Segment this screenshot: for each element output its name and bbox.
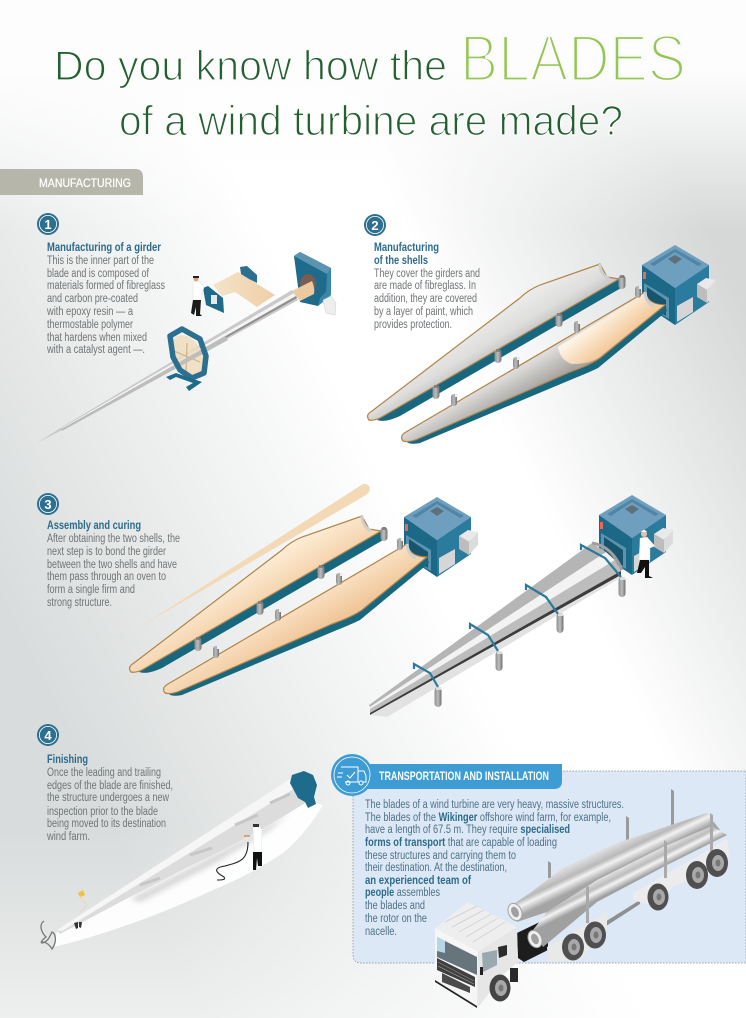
body text: nacelle.	[365, 926, 397, 938]
step 1 text: manufacturing of a girder	[46, 242, 165, 356]
step 2 number badge	[364, 214, 386, 236]
step 3 text: assembly and curing: strong structure.	[47, 597, 112, 609]
step 1 text: manufacturing of a girder: that hardens when mixed	[47, 332, 147, 344]
step 1 text: manufacturing of a girder: thermostable polymer	[47, 319, 133, 331]
body text: their destination. At the destination,	[365, 862, 507, 874]
white blade underside	[53, 800, 323, 947]
step 4 text: finishing	[46, 754, 173, 843]
step 4 number badge: 4	[44, 728, 52, 743]
body text: the rotor on the	[365, 913, 427, 925]
tab heading: TRANSPORTATION AND INSTALLATION	[379, 769, 549, 783]
ring gantry	[61, 329, 228, 431]
front trailer body	[547, 912, 607, 962]
lower shell, tan	[164, 544, 429, 696]
blade shadow	[130, 812, 290, 902]
step 1 number badge	[37, 213, 59, 235]
step 2 text: manufacturing of the shells	[374, 242, 480, 331]
tab heading	[352, 764, 562, 789]
title: BLADES	[460, 21, 686, 95]
worker on blade	[74, 890, 87, 929]
step 3 text: assembly and curing: between the two shells and have	[47, 559, 177, 571]
section tab: manufacturing: MANUFACTURING	[39, 176, 131, 190]
body text: people assembles	[365, 887, 440, 899]
step 4 text: finishing: the structure undergoes a new	[47, 792, 170, 804]
shell supports	[432, 275, 642, 406]
girder above shells	[143, 484, 370, 625]
blue clamps	[414, 545, 621, 687]
rear trailer body	[633, 838, 730, 905]
upper blade	[505, 813, 720, 923]
tapered girder	[37, 281, 314, 443]
upper shell	[368, 264, 621, 421]
body text: the blades and	[365, 900, 425, 912]
step 3 text: assembly and curing: them pass through an oven to	[47, 571, 166, 583]
body text: these structures and carrying them to	[365, 850, 516, 862]
step 3 text: assembly and curing	[47, 520, 180, 609]
illustration: curing in oven	[369, 495, 673, 717]
step 2 text: manufacturing of the shells: They cover the girders and	[374, 268, 480, 280]
title: of a wind turbine are made?	[119, 97, 623, 144]
illustration: shells and oven	[368, 245, 716, 444]
trailer beam	[600, 900, 640, 930]
step 2 text: manufacturing of the shells: addition, they are covered	[374, 293, 477, 305]
step 3 text: assembly and curing: form a single firm and	[47, 584, 135, 596]
panel background	[353, 771, 746, 963]
step 1 text: manufacturing of a girder: materials formed of fibreglass	[47, 280, 165, 292]
step 1 text: manufacturing of a girder: with a catalyst agent —.	[46, 344, 145, 356]
step 1 number badge: 1	[44, 217, 52, 232]
title: Do you know how the	[54, 42, 447, 89]
upper shell, tan	[130, 516, 383, 673]
step 1 text: manufacturing of a girder: This is the inner part of the	[47, 255, 154, 267]
oven	[404, 497, 478, 577]
step 2 text: manufacturing of the shells: provides protection.	[374, 319, 452, 331]
transportation panel	[331, 754, 746, 1008]
body text: an experienced team of	[365, 875, 471, 887]
step 2 text: manufacturing of the shells: by a layer of paint, which	[374, 306, 473, 318]
blade root cap	[290, 771, 317, 808]
body text: The blades of the Wikinger offshore wind farm, for example,	[365, 812, 611, 824]
back stakes	[548, 789, 674, 878]
inspector with hose	[217, 824, 262, 880]
title	[54, 21, 686, 144]
body text: The blades of a wind turbine are very heavy, massive structures.	[365, 799, 624, 811]
blue mould frame	[294, 252, 336, 315]
supports	[434, 577, 626, 707]
step 4 text: finishing: wind farm.	[46, 831, 90, 843]
truck with blades	[435, 789, 730, 1008]
illustration: girder manufacturing	[37, 252, 336, 443]
step 1 text: manufacturing of a girder: blade and is composed of	[47, 268, 150, 280]
oven	[599, 495, 673, 575]
trailer wheels	[562, 849, 728, 960]
step 4 text: finishing: edges of the blade are finished,	[47, 780, 173, 792]
step 1 text: manufacturing of a girder: and carbon pre-coated	[47, 293, 138, 305]
step 3 number badge	[37, 493, 59, 515]
illustration: assembly with girder between shells	[130, 484, 478, 696]
step 3 text: assembly and curing: After obtaining the two shells, the	[47, 533, 180, 545]
shell supports	[194, 527, 404, 658]
illustration: finishing and inspection	[41, 771, 323, 949]
truck cab	[435, 902, 518, 1008]
body text: forms of transport that are capable of loading	[365, 837, 557, 849]
step 2 text: manufacturing of the shells: Manufacturing	[374, 242, 439, 254]
step 2 number badge: 2	[371, 218, 379, 233]
lower shell	[402, 292, 667, 444]
lower blade	[525, 826, 727, 950]
body text	[365, 799, 624, 938]
blade body	[57, 779, 310, 934]
step 1 text: manufacturing of a girder: Manufacturing of a girder	[47, 242, 161, 254]
step 4 text: finishing: Once the leading and trailing	[47, 767, 161, 779]
step 4 text: finishing: inspection prior to the blade	[47, 806, 158, 818]
step 1 text: manufacturing of a girder: with epoxy resin — a	[46, 306, 133, 318]
coiled rope	[41, 921, 55, 949]
section tab: manufacturing	[0, 169, 143, 195]
front stakes	[586, 813, 713, 923]
oven	[642, 245, 716, 325]
body text: have a length of 67.5 m. They require specialised	[365, 824, 570, 836]
step 2 text: manufacturing of the shells: are made of fibreglass. In	[374, 280, 476, 292]
icon: delivery truck	[331, 754, 373, 796]
step 3 text: assembly and curing: next step is to bond the girder	[47, 546, 166, 558]
step 2 text: manufacturing of the shells: of the shells	[374, 255, 428, 267]
trailer chassis	[517, 918, 548, 962]
fibre sheet and roller machine	[203, 266, 275, 313]
step 4 text: finishing: Finishing	[47, 754, 88, 766]
step 4 number badge	[37, 724, 59, 746]
step 3 number badge: 3	[44, 497, 52, 512]
step 3 text: assembly and curing: Assembly and curing	[47, 520, 141, 532]
worker at machine	[191, 276, 204, 316]
step 4 text: finishing: being moved to its destination	[47, 818, 166, 830]
worker at control panel	[637, 530, 655, 578]
closed blade	[369, 543, 622, 717]
